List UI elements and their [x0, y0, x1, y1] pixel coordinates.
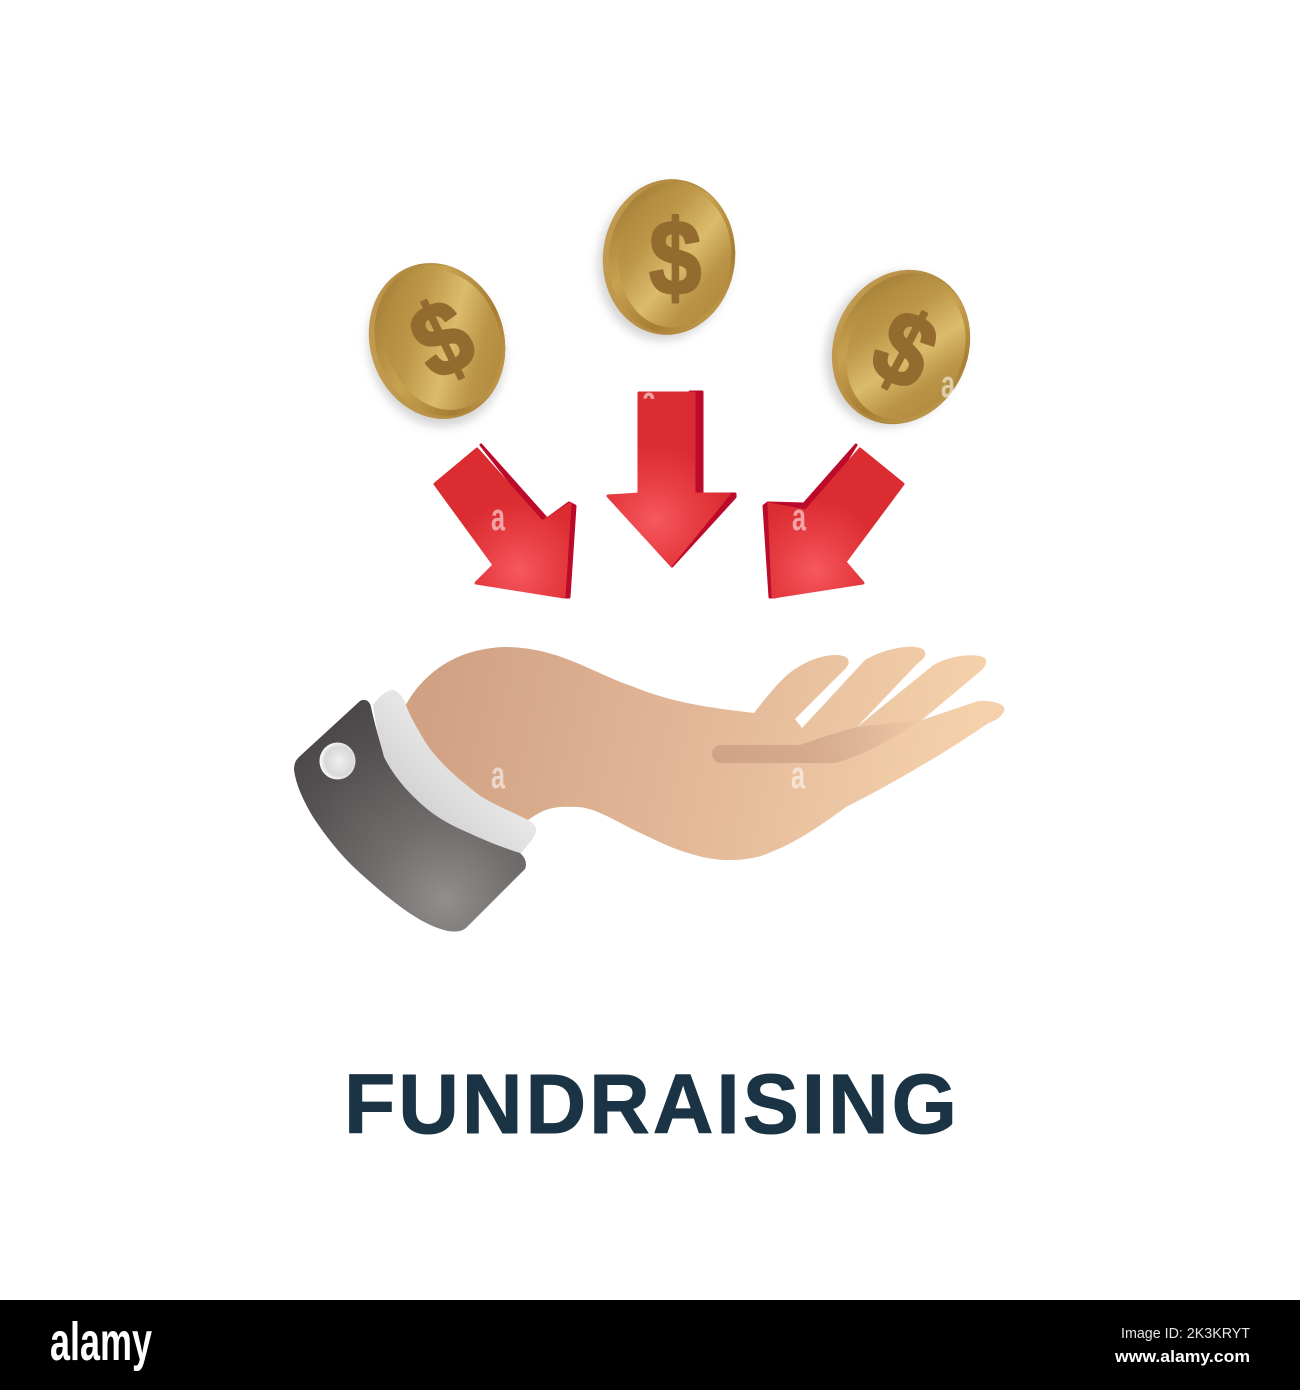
alamy logo: alamy	[50, 1312, 152, 1372]
coin: left: $	[393, 275, 491, 402]
footer bar	[0, 1300, 1300, 1390]
coin: right	[801, 246, 994, 451]
palm and fingers	[395, 647, 1004, 860]
cuff button	[320, 742, 356, 780]
coin: left	[346, 245, 527, 444]
stock watermarks	[491, 364, 956, 797]
stock watermarks: a	[792, 497, 807, 539]
title: FUNDRAISING	[344, 1057, 957, 1151]
stock watermarks: a	[941, 364, 956, 406]
stock watermarks: a	[491, 755, 506, 797]
website: www.alamy.com	[1114, 1347, 1250, 1366]
thumb	[740, 713, 804, 745]
arrow: centre pointing down	[608, 392, 735, 566]
coin: centre: $	[649, 200, 701, 317]
stock watermarks: a	[491, 497, 506, 539]
arrow: left pointing down right	[435, 445, 575, 597]
coin: centre	[589, 171, 744, 348]
jacket sleeve	[294, 700, 526, 932]
arrow: right pointing down left	[764, 445, 903, 597]
stock watermarks: a	[642, 380, 657, 422]
shirt cuff	[373, 690, 536, 853]
palm crease shadow	[712, 720, 922, 763]
hand	[294, 647, 1004, 932]
coin: right: $	[855, 285, 955, 413]
image id: Image ID: 2K3KRYT	[1121, 1325, 1250, 1342]
stock watermarks: a	[791, 755, 806, 797]
